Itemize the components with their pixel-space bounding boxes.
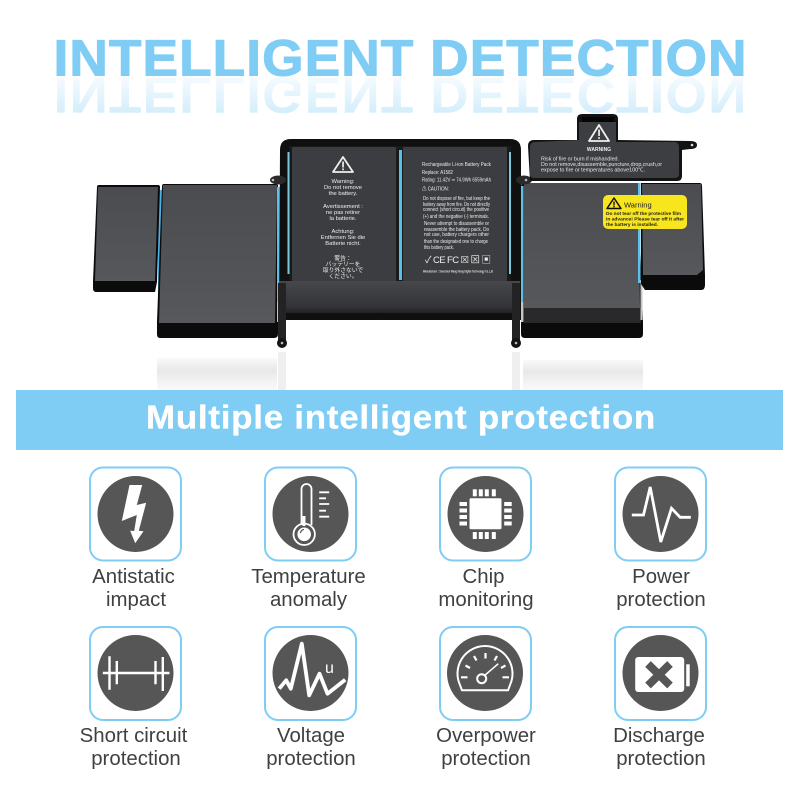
right battery label: Never attempt to disassemble or xyxy=(424,221,489,227)
left battery label: Warning: xyxy=(332,179,355,185)
right battery label: not use, battery chargers other xyxy=(424,232,489,238)
left small cell xyxy=(93,185,163,295)
title: INTELLIGENT DETECTION xyxy=(54,30,748,87)
icon: voltage wave xyxy=(279,644,345,695)
icon: short circuit xyxy=(103,656,170,691)
banner: Multiple intelligent protection xyxy=(146,398,656,436)
left battery label: ください。 xyxy=(328,273,358,280)
icon: empty battery xyxy=(635,657,690,692)
icon: voltage wave: u xyxy=(325,660,334,677)
item: chip monitoring xyxy=(438,468,534,611)
certification marks: ✓ CE FC ☒ ⊠ ▣ xyxy=(425,255,491,266)
right battery label: connect (short circuit) the positive xyxy=(423,207,489,213)
icon: lightning bolt xyxy=(122,485,146,543)
right battery label: (+) and the negative (-) terminals. xyxy=(423,214,489,220)
centre frame xyxy=(279,139,521,320)
right battery label: than the designated one to charge xyxy=(424,239,488,245)
yellow warning sticker: the battery is installed. xyxy=(606,222,658,227)
battery reflection xyxy=(157,352,643,390)
right battery label: this battery pack. xyxy=(424,245,454,251)
title reflection: INTELLIGENT DETECTION xyxy=(54,66,748,123)
right small cell xyxy=(641,183,705,290)
warning plate: Risk of fire or burn if mishandled. xyxy=(541,156,619,162)
item: overpower protection xyxy=(436,627,536,770)
left battery label: 取り外さないで xyxy=(323,266,363,274)
left battery label xyxy=(292,147,396,281)
right battery label xyxy=(403,147,507,281)
item: power protection: protection xyxy=(616,589,706,611)
mounting legs xyxy=(270,176,532,348)
item: short circuit protection: protection xyxy=(91,748,181,770)
right large cell xyxy=(521,183,643,338)
left battery label: 警告： xyxy=(334,254,352,262)
warning triangle xyxy=(333,157,353,172)
yellow warning sticker: Warning xyxy=(624,200,652,210)
icon: pulse xyxy=(632,487,691,542)
warning plate: WARNING xyxy=(587,147,611,153)
left large cell xyxy=(157,184,280,338)
banner xyxy=(16,390,783,450)
left battery label: la batterie. xyxy=(329,216,357,222)
item: antistatic impact xyxy=(90,468,181,611)
left battery label: ne pas retirer xyxy=(326,210,360,216)
item: power protection: Power xyxy=(632,566,690,588)
yellow warning sticker: Do not tear off the protective film xyxy=(606,211,681,216)
item: chip monitoring: Chip xyxy=(463,566,504,588)
right battery label: ⚠ CAUTION: xyxy=(422,186,449,192)
warning plate xyxy=(528,114,697,181)
item: voltage protection: protection xyxy=(266,748,356,770)
item: overpower protection: Overpower xyxy=(436,725,536,747)
item: voltage protection xyxy=(265,627,356,770)
title xyxy=(54,30,748,123)
yellow warning sticker xyxy=(603,195,687,229)
left battery label: バッテリーを xyxy=(326,261,361,268)
item: discharge protection xyxy=(613,627,706,770)
left battery label: Batterie nicht. xyxy=(325,241,361,247)
item: antistatic impact: impact xyxy=(106,589,166,611)
right battery label: Rating: 11.42V ⎓ 74.9Wh 6559mAh xyxy=(422,178,491,184)
right battery label: Manufacturer : Shenzhen Wang Xiang Digital Technology Co.,Ltd xyxy=(423,270,493,274)
left battery label: Entfernen Sie die xyxy=(321,235,365,241)
item: chip monitoring: monitoring xyxy=(438,589,534,611)
right battery label: Do not dispose of fire, but keep the xyxy=(423,196,490,202)
right battery label: battery away from fire. Do not directly xyxy=(423,202,490,208)
left battery label: Do not remove xyxy=(324,185,362,191)
item: power protection xyxy=(615,468,706,611)
warning plate: Do not remove,disassemble,puncture,drop,crush,or xyxy=(541,162,662,168)
item: discharge protection: protection xyxy=(616,748,706,770)
item: voltage protection: Voltage xyxy=(277,725,345,747)
right battery label: Replace: A1582 xyxy=(422,170,453,176)
item: temperature anomaly: Temperature xyxy=(251,566,366,588)
yellow warning sticker: in advance! Please tear off it after xyxy=(606,216,684,222)
left battery label: Achtung: xyxy=(332,229,355,235)
item: short circuit protection: Short circuit xyxy=(80,725,188,747)
icon: chip xyxy=(460,489,512,539)
right battery label: Rechargeable Li-ion Battery Pack xyxy=(422,162,491,168)
item: temperature anomaly: anomaly xyxy=(270,589,348,611)
item: overpower protection: protection xyxy=(441,748,531,770)
left battery label: Avertissement : xyxy=(323,204,363,210)
icon: gauge xyxy=(458,646,512,690)
item: antistatic impact: Antistatic xyxy=(92,566,175,588)
right battery label: reassemble the battery pack. Do xyxy=(424,227,489,233)
item: temperature anomaly xyxy=(251,468,366,611)
left battery label: the battery. xyxy=(329,191,358,197)
item: short circuit protection xyxy=(80,627,188,770)
warning plate: expose to fire or temperatures above100℃. xyxy=(541,168,645,174)
item: discharge protection: Discharge xyxy=(613,725,705,747)
battery illustration xyxy=(93,114,705,348)
icon: thermometer xyxy=(294,484,329,545)
